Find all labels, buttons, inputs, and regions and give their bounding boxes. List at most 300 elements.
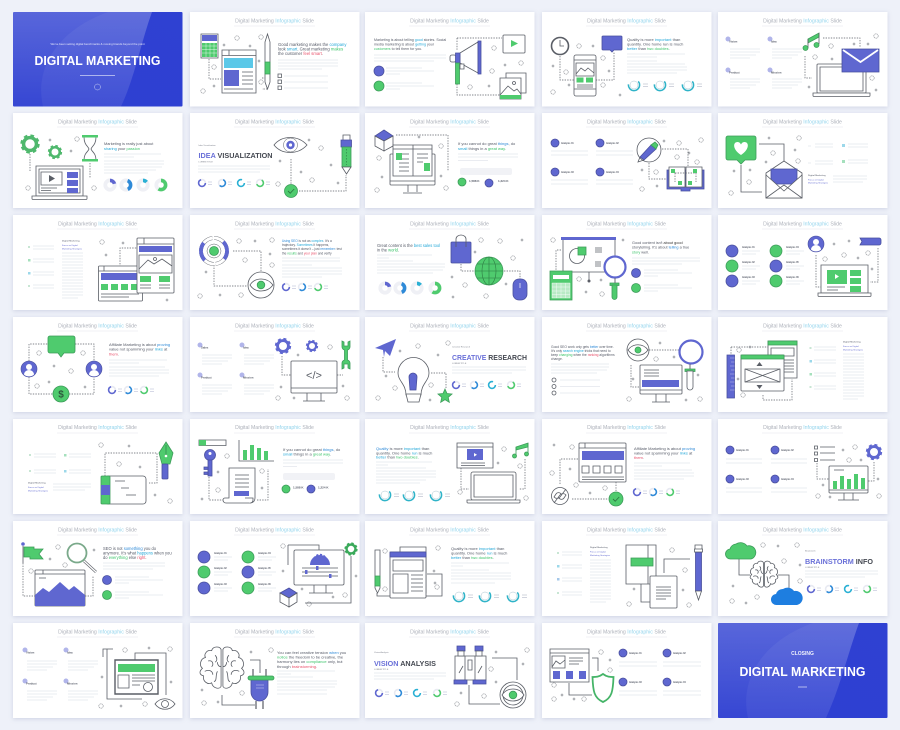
text column: Digital Marketing xyxy=(590,546,608,549)
donuts xyxy=(199,178,270,188)
icon: music note xyxy=(803,33,819,50)
text block: Digital Marketing xyxy=(28,482,46,484)
icon: check circle xyxy=(284,184,298,198)
icon: pencil xyxy=(694,545,702,600)
analysis items: Analysis 01 xyxy=(561,142,574,145)
heading: Digital Marketing Infographic Slide xyxy=(587,630,666,636)
icon: progress bar xyxy=(199,440,226,446)
heading: Digital Marketing Infographic Slide xyxy=(235,528,314,534)
panel: cover slide xyxy=(13,12,182,106)
heading: Digital Marketing Infographic Slide xyxy=(410,120,489,126)
icon: paper xyxy=(650,576,677,608)
icon: gear xyxy=(867,445,881,459)
icon: book xyxy=(667,167,704,191)
heading: Digital Marketing Infographic Slide xyxy=(58,324,137,330)
analysis items: Analysis 03 xyxy=(736,478,749,481)
text block: Digital Marketing xyxy=(808,174,826,177)
stats: 1,588 K xyxy=(469,179,480,183)
icon: phone xyxy=(574,55,596,96)
heading: Digital Marketing Infographic Slide xyxy=(235,425,314,431)
panel: slide 7 idea visualization xyxy=(190,113,360,208)
text block: sometimes it doesn't – just remember: test xyxy=(282,247,342,251)
analysis items: Analysis 01 xyxy=(742,246,755,249)
analysis items xyxy=(619,649,701,695)
panel: slide 20 ruler browsers xyxy=(718,317,888,412)
icon: bar chart xyxy=(239,440,274,461)
items: Mission xyxy=(67,682,78,686)
heading: Digital Marketing Infographic Slide xyxy=(410,222,489,228)
heading: Digital Marketing Infographic Slide xyxy=(58,222,137,228)
donuts xyxy=(453,380,521,390)
icon: binoculars xyxy=(454,646,486,684)
text block: in the world. xyxy=(377,248,399,253)
text block: Affiliate Marketing is about proving xyxy=(634,446,695,451)
icon: laptop xyxy=(813,64,870,96)
panel: slide 33 vision analysis xyxy=(365,623,534,718)
text block: trajectory. Sometimes it happens, xyxy=(282,243,329,247)
icon: magnifier xyxy=(68,544,96,572)
text block: value not spamming your links at xyxy=(109,347,167,352)
donuts xyxy=(283,282,328,292)
analysis items: Analysis 04 xyxy=(258,552,271,555)
text block: Marketing Strategies xyxy=(28,490,49,492)
text block: If you cannot do great things, do xyxy=(458,141,515,146)
heading: Digital Marketing Infographic Slide xyxy=(763,222,842,228)
text block: Marketing is really just about xyxy=(104,141,154,146)
analysis items: Analysis 04 xyxy=(781,478,794,481)
heading: Digital Marketing Infographic Slide xyxy=(235,120,314,126)
icon: calculator xyxy=(550,271,572,300)
title: brainstorm info: BRAINSTORM INFO xyxy=(805,559,874,566)
title: creative research: CREATIVE RESEARCH xyxy=(452,353,527,362)
icon: person left xyxy=(21,361,37,377)
items: Idea xyxy=(243,346,249,350)
text block: Marketing Strategies xyxy=(808,182,829,184)
icon: open envelope xyxy=(766,161,802,198)
icon: key xyxy=(204,450,216,476)
text block: media marketing is about getting your xyxy=(374,42,434,46)
icon: browser wide xyxy=(98,266,142,301)
title: idea visualization: LOREM TITLE xyxy=(198,162,213,164)
icon: chat bubble xyxy=(48,336,75,357)
text block: If you cannot do great things, do xyxy=(283,447,340,452)
text block: customers to tell them for you. xyxy=(374,47,422,51)
analysis items: Analysis 06 xyxy=(258,583,271,586)
icon: check circle xyxy=(609,492,623,506)
text column: Marketing Strategies xyxy=(843,348,864,352)
text column: Focus on Digital xyxy=(590,550,606,554)
text block: Marketing is about telling good stories. Social xyxy=(374,38,446,42)
text block: do everything else right. xyxy=(103,555,146,560)
text block: Quality is more important than xyxy=(627,37,680,42)
headline text: Good marketing makes the company xyxy=(278,42,346,47)
icon: pen nib xyxy=(159,442,173,479)
text block: better than two doubles. xyxy=(627,46,670,51)
heading: Digital Marketing Infographic Slide xyxy=(587,222,666,228)
icon: eye circle xyxy=(248,272,274,298)
list items xyxy=(808,144,868,164)
icon: ruler xyxy=(727,355,734,398)
title: vision analysis: VISION ANALYSIS xyxy=(374,661,436,668)
heading: Digital Marketing Infographic Slide xyxy=(587,528,666,534)
closing title: DIGITAL MARKETING xyxy=(740,664,866,679)
text block: storytelling. It's about telling a true xyxy=(632,246,689,250)
heading: Digital Marketing Infographic Slide xyxy=(587,425,666,431)
text block: You can feel creative tension when you xyxy=(277,650,346,655)
items xyxy=(22,648,98,700)
icon: dollar coin: $ xyxy=(58,390,64,400)
icon: green cloud xyxy=(725,543,756,559)
icon: person right xyxy=(86,361,102,377)
icon: monitor xyxy=(640,365,682,402)
panel: slide 12 ring eye xyxy=(190,215,360,310)
list items xyxy=(29,454,91,473)
icon: monitor code: </> xyxy=(306,370,322,382)
icon: gear large xyxy=(276,339,290,353)
panel: slide 13 bag globe xyxy=(365,215,534,310)
donuts xyxy=(377,487,450,503)
panel: slide 17 code monitor xyxy=(190,317,360,412)
analysis items: Analysis 02 xyxy=(742,261,755,264)
icon: open book xyxy=(393,145,432,176)
items: Mission xyxy=(243,376,254,380)
closing label: CLOSING xyxy=(791,651,814,657)
panel: slide 9 analysis pen xyxy=(542,113,712,208)
text block: through brainstorming. xyxy=(277,664,317,669)
analysis items: Analysis 06 xyxy=(786,276,799,279)
icon: magnifier xyxy=(680,340,702,390)
heading: Digital Marketing Infographic Slide xyxy=(763,120,842,126)
title: vision analysis: Vision Analysis xyxy=(374,651,389,654)
items: Vision xyxy=(729,40,738,44)
heading: Digital Marketing Infographic Slide xyxy=(58,630,137,636)
title: vision analysis: LOREM TITLE xyxy=(374,669,389,671)
analysis items: Analysis 03 xyxy=(561,171,574,174)
panel: slide 34 shield xyxy=(542,623,712,718)
list items xyxy=(28,246,54,288)
icon: heart bubble xyxy=(726,136,756,164)
bullet: green xyxy=(632,284,692,292)
icon: browser tall xyxy=(137,238,174,293)
icon: shield xyxy=(592,674,614,702)
headline text: the customer feel smart. xyxy=(278,51,323,56)
items: Sales xyxy=(201,346,209,350)
icon: gear large xyxy=(21,135,39,153)
analysis items: Analysis 04 xyxy=(606,171,619,174)
heading: Digital Marketing Infographic Slide xyxy=(410,324,489,330)
text block: value not spamming your links at xyxy=(634,450,692,456)
text block: Quality is more important than xyxy=(376,446,429,451)
icon: green gear xyxy=(345,543,357,555)
checklist xyxy=(278,74,328,90)
icon: pen circle xyxy=(637,138,661,162)
analysis items: Analysis 02 xyxy=(214,567,227,570)
items: Vision xyxy=(26,650,35,654)
icon: music notes xyxy=(512,443,528,458)
analysis items: Analysis 05 xyxy=(258,567,271,570)
icon: monitor xyxy=(294,550,344,593)
items: Product xyxy=(729,70,740,74)
icon: card xyxy=(115,660,158,694)
icon: plug xyxy=(248,669,274,709)
icon: cube xyxy=(280,588,297,607)
icon: ribbon xyxy=(860,238,881,245)
heading: Digital Marketing Infographic Slide xyxy=(410,425,489,431)
icon: person xyxy=(808,236,824,252)
text column xyxy=(62,240,83,298)
title: creative research: LOREM TITLE xyxy=(452,363,467,365)
icon: flag xyxy=(21,542,43,563)
title: vision analysis xyxy=(374,651,436,671)
panel: slide 11 browsers xyxy=(13,215,182,310)
icon: presentation board xyxy=(561,237,616,282)
donuts xyxy=(109,385,154,395)
icon: eye rings xyxy=(500,682,526,708)
headline text: look smart. Great marketing makes xyxy=(278,46,343,52)
text column: Marketing Strategies xyxy=(62,248,83,250)
heading: Digital Marketing Infographic Slide xyxy=(235,18,314,24)
analysis items: Analysis 01 xyxy=(214,552,227,555)
icon: gear small xyxy=(307,341,317,351)
icon: wrench xyxy=(342,341,350,369)
icon: brain xyxy=(750,561,778,587)
analysis items: Analysis 03 xyxy=(742,276,755,279)
panel: slide 2 newspaper xyxy=(190,12,360,106)
icon: monitor xyxy=(390,154,435,193)
icon: notebook xyxy=(626,545,656,584)
text block: Good SEO work only gets better over time. xyxy=(551,345,614,349)
icon: video frame xyxy=(503,35,525,53)
panel: slide 26 seo flag xyxy=(13,521,182,616)
items: Product xyxy=(201,376,212,380)
icon: browser back xyxy=(768,341,797,378)
analysis items: Analysis 04 xyxy=(786,246,799,249)
text block: Focus on Digital xyxy=(808,178,824,182)
analysis items xyxy=(198,551,276,594)
icon: eye xyxy=(274,138,307,152)
stats: 1,588 K xyxy=(293,486,304,490)
donuts xyxy=(634,487,680,497)
icon: brain xyxy=(200,647,244,688)
heading: Digital Marketing Infographic Slide xyxy=(587,324,666,330)
icon: checklist xyxy=(814,446,835,462)
items: Idea xyxy=(67,650,73,654)
panel: slide 23 quality laptop xyxy=(365,419,534,514)
panel: slide 22 key document xyxy=(190,419,360,514)
text block: better than two doubles. xyxy=(376,455,419,460)
text block: SEO is not something you do xyxy=(103,546,156,551)
heading: Digital Marketing Infographic Slide xyxy=(587,120,666,126)
bullet: purple xyxy=(374,66,434,76)
text block: change. xyxy=(551,357,563,361)
text block: quantity. One home run is much xyxy=(627,42,683,46)
heading: Digital Marketing Infographic Slide xyxy=(410,18,489,24)
icon: browser xyxy=(579,443,626,482)
text block xyxy=(808,174,829,184)
icon: segmented ring xyxy=(196,233,232,269)
pie charts xyxy=(103,178,168,192)
title: brainstorm info: LOREM TITLE xyxy=(805,567,820,569)
items: Mission xyxy=(771,70,782,74)
heading: Digital Marketing Infographic Slide xyxy=(235,324,314,330)
items xyxy=(198,342,274,394)
heading: Digital Marketing Infographic Slide xyxy=(58,425,137,431)
analysis items: Analysis 01 xyxy=(736,449,749,452)
bullet: purple xyxy=(632,268,692,278)
items xyxy=(726,36,802,88)
title: idea visualization xyxy=(198,144,272,164)
callout box xyxy=(460,168,512,175)
text block: anymore. It's what happens when you xyxy=(103,550,172,556)
icon: eye circle xyxy=(627,339,649,361)
heading: Digital Marketing Infographic Slide xyxy=(763,528,842,534)
title: creative research: Creative Research xyxy=(452,346,471,348)
panel: slide 32 brain plug xyxy=(190,623,360,718)
text block: harmony lies on compliance only, but xyxy=(277,659,343,664)
icon: newspaper xyxy=(222,50,256,93)
donuts xyxy=(626,77,702,93)
icon: laptop video xyxy=(32,166,87,200)
panel: slide 21 pen nib xyxy=(13,419,182,514)
title: idea visualization: Idea Visualization xyxy=(198,144,216,147)
bullet: green xyxy=(374,81,434,91)
text column: Focus on Digital xyxy=(62,244,78,247)
analysis items: Analysis 01 xyxy=(629,652,642,655)
panel: slide 29 notebook pencil xyxy=(542,521,712,616)
heading: Digital Marketing Infographic Slide xyxy=(58,120,137,126)
items: Idea xyxy=(771,40,777,44)
title: brainstorm info: Brainstorm xyxy=(805,550,816,552)
analysis items xyxy=(551,139,633,184)
panel: slide 3 megaphone xyxy=(365,12,534,106)
text block: Great content is the best sales tool xyxy=(377,243,440,248)
text block: Using SEO is not as complex. It's a xyxy=(282,239,332,243)
icon: chain link xyxy=(552,488,568,504)
stats xyxy=(458,178,509,187)
heading: Digital Marketing Infographic Slide xyxy=(410,630,489,636)
panel: slide 15 analysis laptop xyxy=(718,215,888,310)
text block: keep changing when the ranking algorithms xyxy=(551,353,615,357)
icon: pictures xyxy=(500,73,526,99)
icon: laptop xyxy=(818,265,871,296)
heading: Digital Marketing Infographic Slide xyxy=(763,18,842,24)
icon: speech bubble xyxy=(602,36,622,52)
icon: globe xyxy=(475,257,503,285)
panel: slide 4 mobile xyxy=(542,12,712,106)
title: idea visualization: IDEA VISUALIZATION xyxy=(198,151,272,160)
cover tagline: We've been setting digital benchmarks & moving brands beyond the point xyxy=(50,42,145,46)
text block: quantity. One home run is much xyxy=(376,450,432,455)
text block: better than two doubles. xyxy=(451,555,494,560)
text block: Quality is more important than xyxy=(451,546,504,551)
panel: slide 18 creative research xyxy=(365,317,534,412)
icon: magnifier xyxy=(604,256,626,300)
icon: mouse xyxy=(513,279,527,300)
heading: Digital Marketing Infographic Slide xyxy=(235,630,314,636)
panel: slide 8 monitor book xyxy=(365,113,534,208)
heading: Digital Marketing Infographic Slide xyxy=(763,425,842,431)
panel: slide 14 board magnifier xyxy=(542,215,712,310)
list items xyxy=(810,347,836,389)
text block: notice the freedom to be creative, the xyxy=(277,655,343,660)
text block: small things in a great way. xyxy=(458,146,506,151)
analysis items xyxy=(726,245,804,287)
stats: 1,224 K xyxy=(498,179,509,183)
panel: slide 10 heart envelope xyxy=(718,113,888,208)
icon: monitor code xyxy=(291,361,337,401)
panel: slide 31 card eye xyxy=(13,623,182,718)
donuts xyxy=(376,688,447,698)
text column: Marketing Strategies xyxy=(590,554,611,557)
checklist xyxy=(552,378,600,395)
panel: slide 6 gears xyxy=(13,113,182,208)
icon: calculator xyxy=(201,34,218,58)
callout box xyxy=(283,473,335,480)
icon: browser xyxy=(457,443,493,468)
icon: newspaper xyxy=(390,547,426,598)
heading: Digital Marketing Infographic Slide xyxy=(58,528,137,534)
stats xyxy=(282,485,329,493)
panel: closing slide xyxy=(718,623,888,718)
icon: cube xyxy=(375,130,393,151)
text column: Digital Marketing xyxy=(62,240,80,242)
text block xyxy=(28,482,91,492)
icon: clock xyxy=(552,38,568,54)
text column xyxy=(843,340,864,399)
heading: Digital Marketing Infographic Slide xyxy=(763,324,842,330)
analysis items: Analysis 02 xyxy=(781,449,794,452)
text block: quantity. One home run is much xyxy=(451,550,507,556)
cover title: DIGITAL MARKETING xyxy=(34,53,160,68)
title: brainstorm info xyxy=(805,550,874,569)
text block: Focus on Digital xyxy=(28,486,44,489)
icon: star xyxy=(438,389,452,402)
text block: Affiliate Marketing is about proving xyxy=(109,342,170,347)
icon: hourglass xyxy=(82,135,98,162)
analysis items: Analysis 05 xyxy=(786,261,799,264)
text block: the results and your plan and verify xyxy=(282,251,332,255)
analysis items: Analysis 02 xyxy=(673,652,686,655)
icon: browser mountains xyxy=(35,570,85,606)
panel: slide 25 analysis chart xyxy=(718,419,888,514)
icon: dollar coin xyxy=(53,386,69,402)
text column: Focus on Digital xyxy=(843,345,859,348)
donuts xyxy=(808,584,877,594)
text column xyxy=(590,546,611,602)
text block: sharing your passion xyxy=(104,146,140,151)
bullet: purple xyxy=(102,576,163,584)
stats: 1,224 K xyxy=(318,486,329,490)
icon: blue cloud xyxy=(771,588,803,605)
heading: Digital Marketing Infographic Slide xyxy=(235,222,314,228)
heading: Digital Marketing Infographic Slide xyxy=(410,528,489,534)
panel: slide 19 seo monitor xyxy=(542,317,712,412)
icon: card xyxy=(101,476,146,504)
panel: slide 28 newspaper pen xyxy=(365,521,534,616)
analysis items: Analysis 03 xyxy=(214,583,227,586)
text block: Good content isn't about good xyxy=(632,241,683,245)
icon: megaphone xyxy=(450,41,481,84)
text block: them. xyxy=(109,351,119,356)
cover icon xyxy=(94,84,100,90)
donuts xyxy=(451,588,527,604)
text column: Digital Marketing xyxy=(843,340,861,344)
pie charts xyxy=(378,281,442,295)
bullet: green xyxy=(102,590,163,600)
title: creative research xyxy=(452,346,527,365)
icon: paper plane xyxy=(375,339,396,357)
icon: monitor chart xyxy=(829,466,868,500)
